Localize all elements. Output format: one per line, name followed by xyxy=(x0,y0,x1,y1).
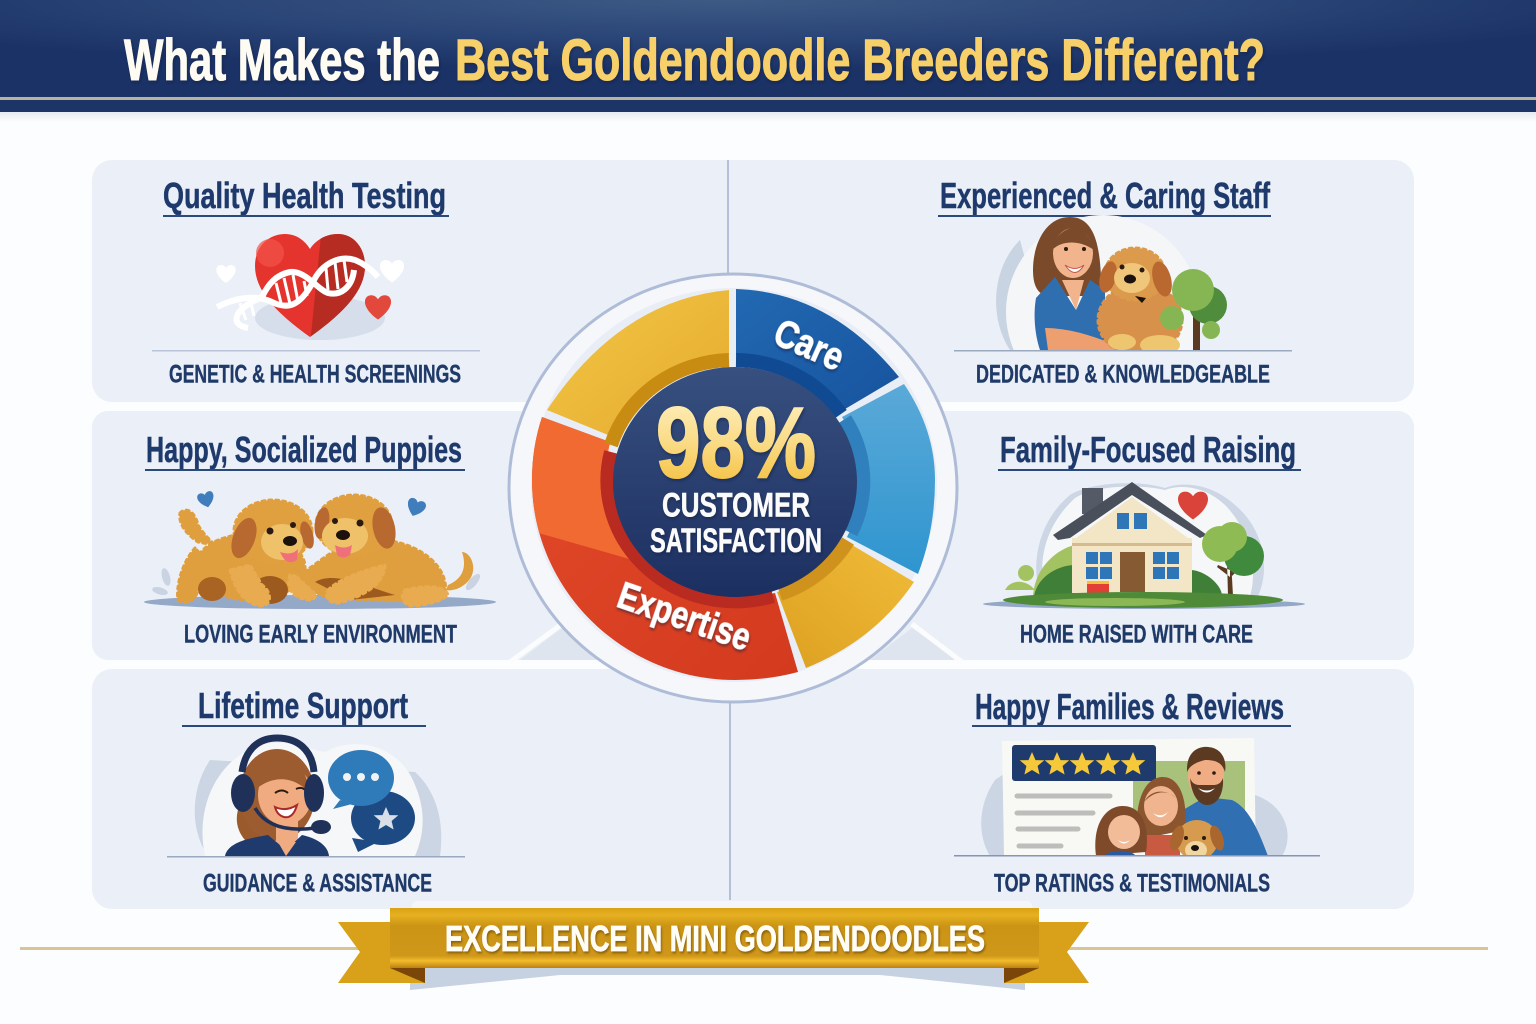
caption: GENETIC & HEALTH SCREENINGS xyxy=(169,360,461,388)
segment: expertise red xyxy=(525,410,798,680)
title: Best Goldendoodle Breeders Different? xyxy=(455,28,1265,93)
heading: Experienced & Caring Staff xyxy=(940,175,1271,216)
icon: house with heart and tree xyxy=(983,482,1305,609)
panel: Happy Families & Reviews xyxy=(954,686,1320,898)
icon: two puppies xyxy=(144,490,496,609)
caption: TOP RATINGS & TESTIMONIALS xyxy=(994,870,1270,898)
ribbon text: EXCELLENCE IN MINI GOLDENDOODLES xyxy=(445,918,985,959)
header banner xyxy=(0,0,1536,122)
caption: GUIDANCE & ASSISTANCE xyxy=(203,870,432,898)
caption: DEDICATED & KNOWLEDGEABLE xyxy=(976,360,1270,388)
label: Care: Care xyxy=(767,311,851,380)
heading: Happy, Socialized Puppies xyxy=(146,429,462,470)
segment: care blue xyxy=(736,289,899,412)
panel: Lifetime Support xyxy=(167,685,465,898)
panel: background rows xyxy=(92,160,1414,909)
heading: Lifetime Support xyxy=(198,685,408,726)
segment: gold lower right xyxy=(777,542,914,668)
panel: Quality Health Testing xyxy=(152,175,480,388)
icon: woman with puppy and tree xyxy=(996,215,1227,350)
ribbon banner xyxy=(20,901,1488,990)
center circle xyxy=(613,367,857,597)
panel: Family-Focused Raising xyxy=(983,429,1305,648)
panel: Experienced & Caring Staff xyxy=(938,181,1292,383)
center label xyxy=(650,486,822,560)
center label: SATISFACTION xyxy=(650,522,822,560)
title: What Makes the xyxy=(124,28,440,93)
caption: HOME RAISED WITH CARE xyxy=(1020,620,1253,648)
heading: Happy Families & Reviews xyxy=(975,686,1284,727)
icon: headset agent with chat bubbles xyxy=(195,738,441,856)
heading: Family-Focused Raising xyxy=(1000,429,1296,470)
center value: 98%: 98% xyxy=(656,387,816,499)
title xyxy=(124,28,1265,93)
chart: satisfaction donut xyxy=(509,274,957,702)
segment: gold left xyxy=(547,290,729,437)
segment: light blue xyxy=(842,384,935,574)
caption: LOVING EARLY ENVIRONMENT xyxy=(184,620,457,648)
right puppy xyxy=(298,495,473,606)
left puppy xyxy=(178,500,316,606)
icon: review card and family xyxy=(981,738,1288,860)
heading: Quality Health Testing xyxy=(163,175,446,216)
center label: CUSTOMER xyxy=(662,486,810,524)
panel: Happy, Socialized Puppies xyxy=(144,429,496,648)
label: Expertise: Expertise xyxy=(612,575,756,659)
icon: heart with DNA xyxy=(216,234,404,340)
inner accent ring xyxy=(607,360,863,601)
